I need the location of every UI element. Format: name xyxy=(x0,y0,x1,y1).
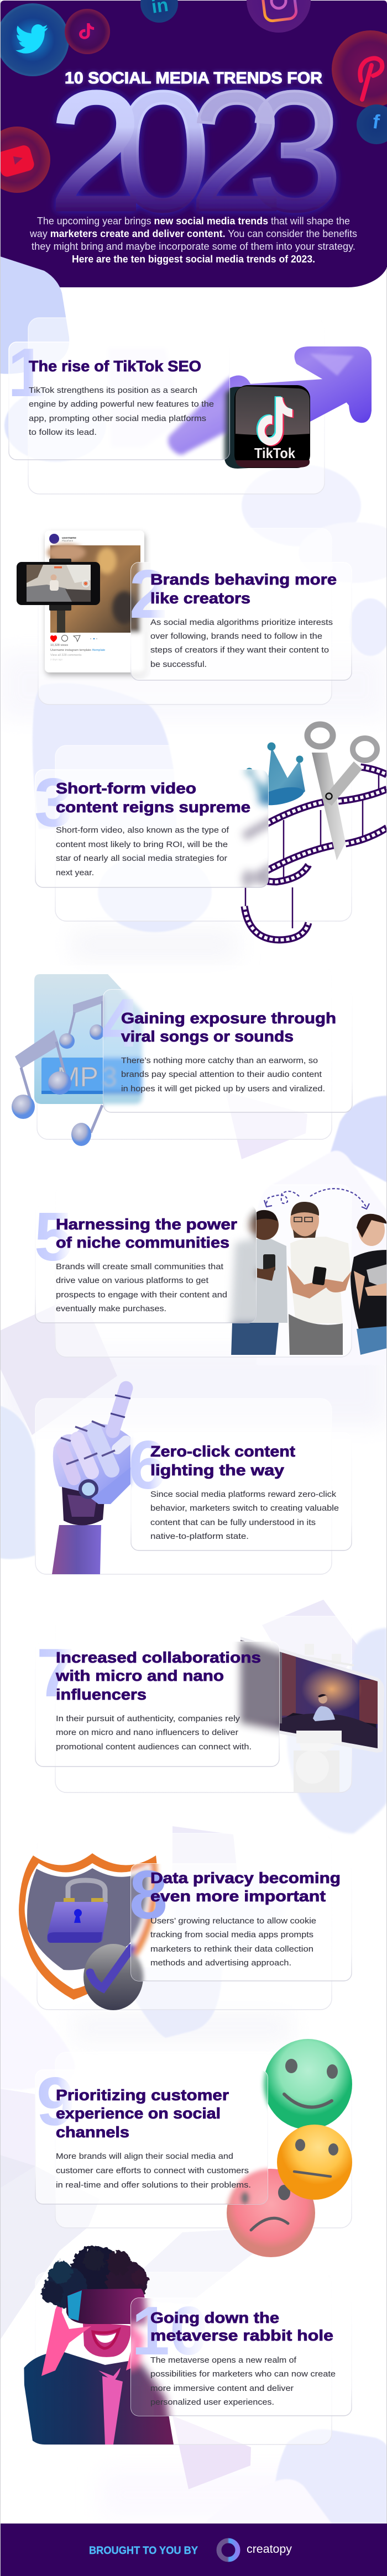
panel: trend 4 viral songs xyxy=(12,966,352,1146)
panel: trend 9 customer experience xyxy=(35,2039,352,2257)
text 9: customer care efforts to connect with customers xyxy=(56,2166,249,2175)
text 8: methods and advertising approach. xyxy=(150,1958,291,1968)
text 5 xyxy=(56,1262,227,1313)
heading 3: Short-form video xyxy=(56,780,196,797)
text 7: more on micro and nano influencers to deliver xyxy=(56,1728,238,1737)
heading 4: viral songs or sounds xyxy=(121,1028,294,1045)
big year 2023: 2 xyxy=(49,56,143,246)
blurred file behind glass xyxy=(103,990,145,1108)
heading 4 xyxy=(121,1010,336,1045)
front card 6 xyxy=(131,1433,352,1550)
intro text: Here are the ten biggest social media trends of 2023. xyxy=(72,253,315,265)
blurred faces behind glass xyxy=(227,2039,352,2257)
heading 6 xyxy=(150,1443,295,1479)
heading 1: The rise of TikTok SEO xyxy=(29,358,201,375)
text 6: content that can be fully understood in its xyxy=(150,1518,316,1527)
text 1: app, prompting other social media platforms xyxy=(29,414,206,423)
illustration: people with phones xyxy=(231,1202,387,1357)
number 1: 1 xyxy=(8,335,46,411)
blurred arrow behind glass xyxy=(165,375,229,460)
illustration: robot hand xyxy=(52,1388,131,1574)
blurred film behind glass xyxy=(238,770,268,887)
text 5: Brands will create small communities that xyxy=(56,1262,224,1271)
blurred post behind glass xyxy=(131,562,148,679)
text 3: content most likely to bring ROI, will be the xyxy=(56,840,228,849)
number 8: 8 xyxy=(129,1857,168,1933)
text 1: TikTok strengthens its position as a search xyxy=(29,386,197,395)
front card 10 xyxy=(131,2298,352,2416)
number 4: 4 xyxy=(102,985,140,1061)
text 2: over following, brands need to follow in the xyxy=(150,632,322,641)
heading 3: content reigns supreme xyxy=(56,798,250,816)
heading 10 xyxy=(150,2309,333,2344)
text 5: drive value on various platforms to get xyxy=(56,1276,209,1285)
heading 8: Data privacy becoming xyxy=(150,1869,341,1886)
header panel xyxy=(0,0,387,287)
back card 2 xyxy=(38,528,332,705)
text 3: star of nearly all social media strategies for xyxy=(56,854,227,863)
number 7: 7 xyxy=(36,1635,75,1711)
heading 10: metaverse rabbit hole xyxy=(150,2327,333,2344)
heading 6: lighting the way xyxy=(150,1462,284,1479)
blurred phone behind glass xyxy=(240,1636,384,1792)
front card 2 xyxy=(131,562,352,680)
icon: YouTube bubble xyxy=(0,127,50,193)
heading 8 xyxy=(150,1869,341,1905)
heading 2: like creators xyxy=(150,590,250,607)
text 2: steps of creators if they want their content to xyxy=(150,645,329,655)
post small text: Placehere xyxy=(62,539,74,542)
back card 1 xyxy=(28,318,325,494)
heading 3 xyxy=(56,780,250,816)
heading 9 xyxy=(56,2086,229,2141)
panel: trend 5 niche communities xyxy=(34,1185,387,1357)
front card 9 xyxy=(35,2070,268,2204)
post small text: View all 328 comments xyxy=(50,654,82,657)
text 3: next year. xyxy=(56,868,94,877)
post small text: Username instagram template #template xyxy=(50,649,105,652)
text 9 xyxy=(56,2152,251,2190)
text 2: be successful. xyxy=(150,660,207,669)
number 2: 2 xyxy=(129,556,168,633)
text 2 xyxy=(150,618,333,669)
arrows: dashed share arcs xyxy=(266,1189,367,1208)
number 10: 10 xyxy=(132,2293,208,2369)
heading 4: Gaining exposure through xyxy=(121,1010,336,1027)
blurred shield behind glass xyxy=(19,1853,158,2010)
number 6: 6 xyxy=(128,1427,166,1503)
big year 2023: 2 xyxy=(189,56,284,246)
icon: TikTok bubble xyxy=(65,9,110,54)
text 3 xyxy=(56,826,229,877)
panel: trend 10 metaverse xyxy=(22,2246,352,2444)
illustration: social post and phone xyxy=(17,530,144,672)
heading 5: of niche communities xyxy=(56,1234,229,1251)
post small text: username xyxy=(62,537,76,540)
icon: TikTok cube and arrow xyxy=(224,346,372,469)
panel: trend 1 TikTok SEO xyxy=(8,318,369,494)
illustration: woman in VR headset xyxy=(22,2246,174,2444)
big year 2023: 0 xyxy=(116,56,210,246)
icon: TikTok wordmark: TikTok xyxy=(254,445,295,461)
back card 7 xyxy=(55,1616,352,1792)
icon: MP3 lettering: MP xyxy=(57,1061,98,1092)
heading 8: even more important xyxy=(150,1888,326,1905)
text 4: in hopes it will get picked up by users and viralized. xyxy=(121,1084,325,1094)
heading 7 xyxy=(55,1649,261,1703)
icon: Facebook bubble: f xyxy=(371,110,381,133)
icon: note heads xyxy=(12,1071,91,1146)
illustration: phone on tripod xyxy=(240,1636,384,1792)
panel: trend 3 short-form video xyxy=(34,724,387,940)
heading 10: Going down the xyxy=(150,2309,279,2326)
text 7 xyxy=(56,1714,252,1752)
footer band xyxy=(1,2524,387,2576)
text 5: eventually make purchases. xyxy=(56,1304,166,1313)
illustration: mood faces xyxy=(227,2039,352,2257)
front card 1 xyxy=(9,342,229,460)
heading 7: Increased collaborations xyxy=(56,1649,261,1666)
logo: creatopy ring xyxy=(219,2541,238,2559)
panel: trend 7 influencers xyxy=(35,1616,384,1792)
blurred people behind glass xyxy=(227,1207,256,1323)
number 5: 5 xyxy=(34,1199,72,1275)
icon: MP3 blurred digit: 3 xyxy=(102,1061,117,1092)
back card 10 xyxy=(35,2272,332,2444)
panel: trend 8 data privacy xyxy=(19,1833,352,2010)
heading 2 xyxy=(150,571,337,607)
blurred woman behind glass xyxy=(22,2246,174,2444)
heading 7: with micro and nano xyxy=(55,1667,224,1684)
text 10 xyxy=(150,2356,336,2407)
big year 2023 xyxy=(49,56,342,246)
heading 2: Brands behaving more xyxy=(150,571,337,588)
text 2: As social media algorithms prioritize interests xyxy=(150,618,333,627)
icon: LinkedIn bubble xyxy=(140,0,178,23)
heading 9: channels xyxy=(56,2123,129,2141)
blurred hand behind glass xyxy=(52,1388,131,1574)
text 7: promotional content audiences can connect with. xyxy=(56,1742,252,1752)
panel: trend 6 zero-click xyxy=(35,1388,352,1574)
text 6: native-to-platform state. xyxy=(150,1532,249,1541)
heading 7: influencers xyxy=(56,1686,147,1703)
heading 6: Zero-click content xyxy=(150,1443,295,1460)
back card 4 xyxy=(37,966,332,1139)
text 4 xyxy=(121,1056,325,1094)
front card 4 xyxy=(103,990,352,1112)
heading 9: experience on social xyxy=(56,2105,221,2122)
icon: Twitter bubble xyxy=(0,3,69,76)
number 3: 3 xyxy=(34,765,72,841)
illustration: film strip crown scissors xyxy=(243,724,387,940)
text 3: Short-form video, also known as the type of xyxy=(56,826,229,835)
arrow heads xyxy=(264,1200,369,1209)
front card 8 xyxy=(131,1864,352,1981)
post small text: 2 days ago xyxy=(50,658,63,661)
heading 9: Prioritizing customer xyxy=(56,2086,229,2104)
panel: trend 2 brands like creators xyxy=(17,528,352,705)
text 8: Users’ growing reluctance to allow cookie xyxy=(150,1916,316,1926)
icon: Instagram bubble xyxy=(247,0,311,33)
text 8: tracking from social media apps prompts xyxy=(150,1930,313,1939)
text 9: More brands will align their social media and xyxy=(56,2152,233,2161)
title: 10 SOCIAL MEDIA TRENDS FOR xyxy=(65,69,322,87)
front card 5 xyxy=(35,1205,256,1323)
illustration: MP3 file and notes xyxy=(15,974,122,1133)
back card 3 xyxy=(55,745,352,921)
back card 5 xyxy=(55,1185,352,1357)
back card 8 xyxy=(37,1833,332,2010)
footer credit: BROUGHT TO YOU BY xyxy=(89,2545,198,2557)
back card 9 xyxy=(55,2052,352,2228)
heading 5: Harnessing the power xyxy=(56,1216,237,1233)
text 6: behavior, marketers switch to creating valuable xyxy=(150,1503,339,1513)
intro text: The upcoming year brings new social media trends that will shape the xyxy=(37,215,350,227)
logo: creatopy wordmark: creatopy xyxy=(247,2543,292,2556)
text 8: marketers to rethink their data collection xyxy=(150,1944,313,1954)
intro text xyxy=(29,215,357,265)
text 10: more immersive content and deliver xyxy=(150,2384,294,2393)
text 1: to follow its lead. xyxy=(29,428,97,437)
post small text xyxy=(50,537,105,661)
front card 3 xyxy=(35,770,268,887)
text 10: possibilities for marketers who can now create xyxy=(150,2369,336,2379)
text 6: Since social media platforms reward zero-click xyxy=(150,1490,337,1499)
text 7: In their pursuit of authenticity, companies rely xyxy=(56,1714,240,1723)
heading 5 xyxy=(56,1216,237,1251)
text 1: engine by adding powerful new features to the xyxy=(29,399,214,409)
text 4: brands pay special attention to their audio content xyxy=(121,1070,322,1079)
intro text: they might bring and maybe incorporate some of them into your strategy. xyxy=(32,240,355,252)
text 8 xyxy=(150,1916,316,1968)
text 4: There’s nothing more catchy than an earworm, so xyxy=(121,1056,318,1065)
text 10: personalized user experiences. xyxy=(150,2398,274,2407)
back card 6 xyxy=(35,1399,332,1574)
text 6 xyxy=(150,1490,339,1541)
icon: Facebook bubble xyxy=(357,104,387,144)
icon: Pinterest bubble xyxy=(332,30,387,108)
big year 2023: 3 xyxy=(248,56,342,246)
header blob overlap xyxy=(0,256,69,374)
illustration: shield lock and check xyxy=(19,1853,158,2010)
front card 7 xyxy=(35,1642,279,1767)
text 10: The metaverse opens a new realm of xyxy=(150,2356,297,2365)
text 9: in real-time and offer solutions to their problems. xyxy=(56,2180,251,2190)
number 9: 9 xyxy=(36,2064,75,2140)
text 5: prospects to engage with their content and xyxy=(56,1290,227,1300)
text 1 xyxy=(29,386,214,437)
post small text: 10,328 views xyxy=(50,644,68,647)
intro text: way marketers create and deliver content. You can consider the benefits xyxy=(29,228,357,239)
